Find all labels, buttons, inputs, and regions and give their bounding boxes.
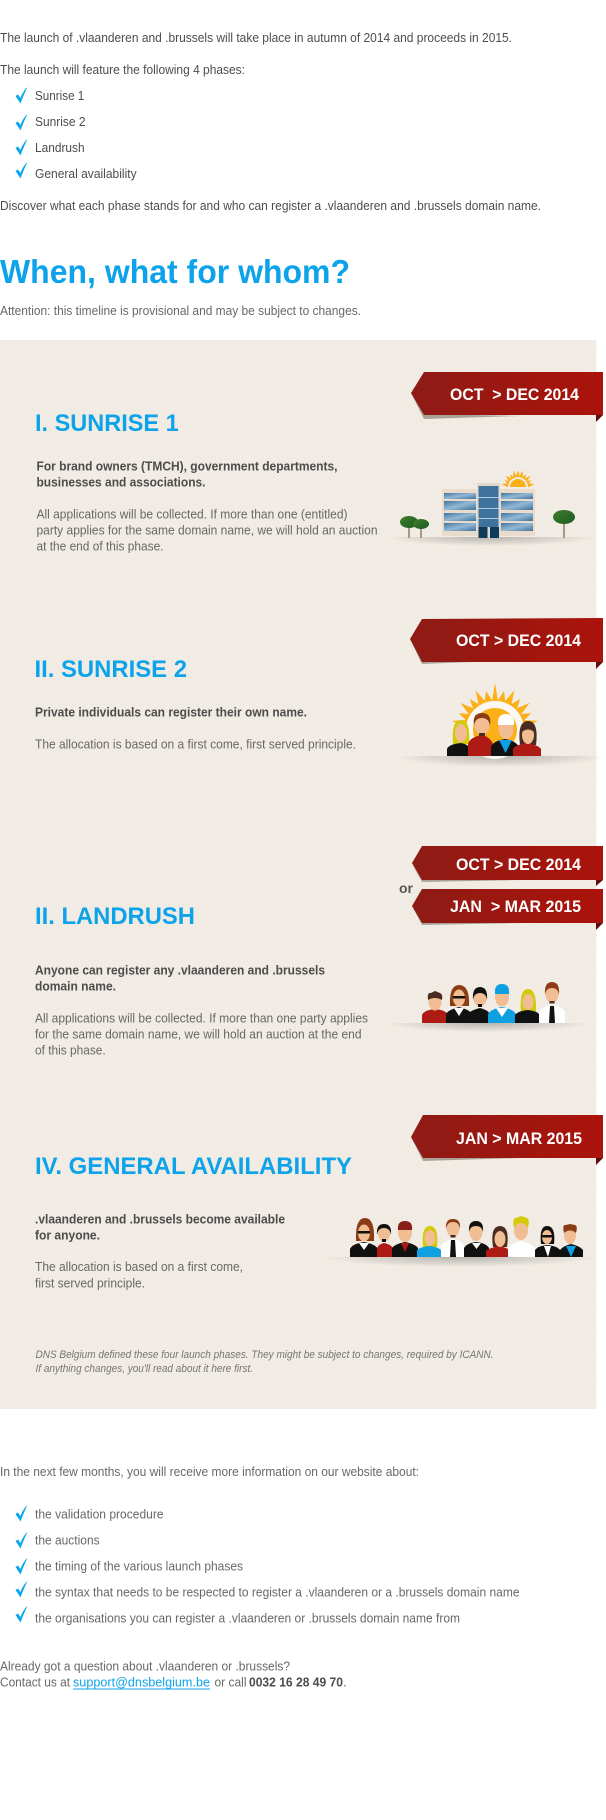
phase 4 text: .vlaanderen and .brussels become available — [35, 1212, 285, 1226]
contact text: support@dnsbelgium.be — [73, 1674, 210, 1690]
phase 4 text: first served principle. — [35, 1276, 145, 1290]
person: man with goatee — [468, 987, 490, 1023]
phase 3 text: of this phase. — [35, 1042, 106, 1058]
person: man in red — [422, 991, 448, 1023]
phase 1 text: All applications will be collected. If more than one (entitled) — [36, 506, 348, 522]
phase 3 date ribbons: OCT > DEC 2014 — [456, 856, 582, 874]
information checklist: the syntax that needs to be respected to register a .vlaanderen or a .brussels domain name — [35, 1584, 520, 1600]
person: woman with glasses — [446, 985, 472, 1023]
information checklist: the auctions — [35, 1532, 100, 1548]
icon: six people — [385, 982, 590, 1041]
phase 4 text: for anyone. — [35, 1228, 100, 1242]
phase 1 text: party applies for the same domain name, we will hold an auction — [36, 522, 378, 538]
date ribbon: Oct to Dec 2014: OCT > DEC 2014 — [450, 386, 580, 404]
phase 1 heading: I. SUNRISE 1 — [35, 410, 179, 437]
phases checklist: Landrush — [35, 140, 85, 155]
phase 3 heading: II. LANDRUSH — [35, 903, 195, 930]
contact text: . — [343, 1674, 347, 1690]
intro text: The launch will feature the following 4 phases: — [0, 62, 245, 77]
person: woman with dark hair — [513, 721, 541, 756]
phase 3 text: domain name. — [35, 978, 116, 994]
person: man with blue cap — [488, 984, 516, 1023]
phase 3 date ribbons — [412, 846, 603, 930]
person: woman with black hair and glasses — [535, 1226, 560, 1257]
phase 3 text: for the same domain name, we will hold an auction at the end — [35, 1026, 362, 1042]
contact text — [0, 1658, 347, 1690]
intro text — [0, 30, 512, 77]
phase 1 text — [36, 458, 378, 554]
phase 1 text: at the end of this phase. — [36, 538, 164, 554]
attention note: Attention: this timeline is provisional and may be subject to changes. — [0, 303, 361, 318]
person: blonde woman — [447, 720, 470, 756]
footnote: If anything changes, you'll read about it here first. — [36, 1363, 253, 1375]
phases checklist — [16, 87, 137, 181]
contact text: Already got a question about .vlaanderen or .brussels? — [0, 1658, 290, 1674]
information checklist — [16, 1505, 520, 1626]
person: man with tie — [539, 982, 565, 1023]
information checklist: the timing of the various launch phases — [35, 1558, 243, 1574]
phase 1 text: businesses and associations. — [36, 474, 206, 490]
phase 2 text: Private individuals can register their own name. — [35, 704, 307, 720]
information checklist: the organisations you can register a .vlaanderen or .brussels domain name from — [35, 1610, 460, 1626]
date ribbon: Oct to Dec 2014 — [410, 618, 603, 669]
person: blonde woman — [515, 989, 540, 1023]
phase 2 heading: II. SUNRISE 2 — [34, 656, 187, 683]
person: blond man in white — [508, 1216, 535, 1257]
person: man with blue shirt — [560, 1224, 583, 1257]
contact text: or call — [214, 1674, 247, 1690]
phase 3 text — [35, 962, 368, 1058]
information checklist: the validation procedure — [35, 1506, 164, 1522]
person: man with red cap — [392, 1221, 418, 1257]
contact text: Contact us at — [0, 1674, 70, 1690]
phase 3 text: All applications will be collected. If more than one party applies — [35, 1010, 368, 1026]
phase 1 text: For brand owners (TMCH), government departments, — [36, 458, 338, 474]
person: woman with glasses — [350, 1218, 378, 1257]
panel background — [0, 340, 596, 1409]
person: blonde woman — [417, 1226, 441, 1257]
icon: ten people — [320, 1216, 597, 1277]
phase 4 heading: IV. GENERAL AVAILABILITY — [35, 1153, 352, 1180]
phase 3 text: Anyone can register any .vlaanderen and .brussels — [35, 962, 325, 978]
or label: or — [399, 880, 414, 896]
more information sentence: In the next few months, you will receive more information on our website about: — [0, 1464, 419, 1479]
phases checklist: Sunrise 2 — [35, 114, 86, 129]
person: man in black suit — [464, 1221, 489, 1257]
person: man with tie — [441, 1219, 464, 1257]
phase 4 text: The allocation is based on a first come, — [35, 1259, 243, 1274]
discover sentence: Discover what each phase stands for and who can register a .vlaanderen and .brussels domain name. — [0, 198, 541, 213]
person: man with white cap — [491, 714, 519, 756]
footnote — [36, 1349, 494, 1375]
person: man with red shirt — [468, 713, 493, 756]
phase 2 text: The allocation is based on a first come, first served principle. — [35, 736, 356, 752]
person: man with goatee in red vest — [377, 1224, 393, 1257]
footnote: DNS Belgium defined these four launch phases. They might be subject to changes, required by ICANN. — [36, 1349, 494, 1361]
title: When, what for whom? — [0, 253, 350, 290]
intro text: The launch of .vlaanderen and .brussels will take place in autumn of 2014 and proceeds in 2015. — [0, 30, 512, 45]
date ribbon: Oct to Dec 2014 — [411, 372, 603, 422]
contact text: 0032 16 28 49 70 — [249, 1674, 343, 1690]
person: woman with brown hair — [486, 1226, 511, 1257]
icon: office building with sun and trees — [385, 470, 596, 555]
phases checklist: Sunrise 1 — [35, 88, 84, 103]
phase 3 date ribbons: JAN > MAR 2015 — [450, 898, 581, 916]
panel: timeline — [0, 340, 606, 1409]
date ribbon: Jan to Mar 2015: JAN > MAR 2015 — [456, 1130, 582, 1148]
date ribbon: Jan to Mar 2015 — [411, 1115, 603, 1165]
phases checklist: General availability — [35, 166, 137, 181]
icon: four people with sun — [395, 683, 606, 778]
date ribbon: Oct to Dec 2014: OCT > DEC 2014 — [456, 632, 582, 650]
phase 4 text — [35, 1212, 285, 1290]
phase 2 text — [35, 704, 356, 752]
